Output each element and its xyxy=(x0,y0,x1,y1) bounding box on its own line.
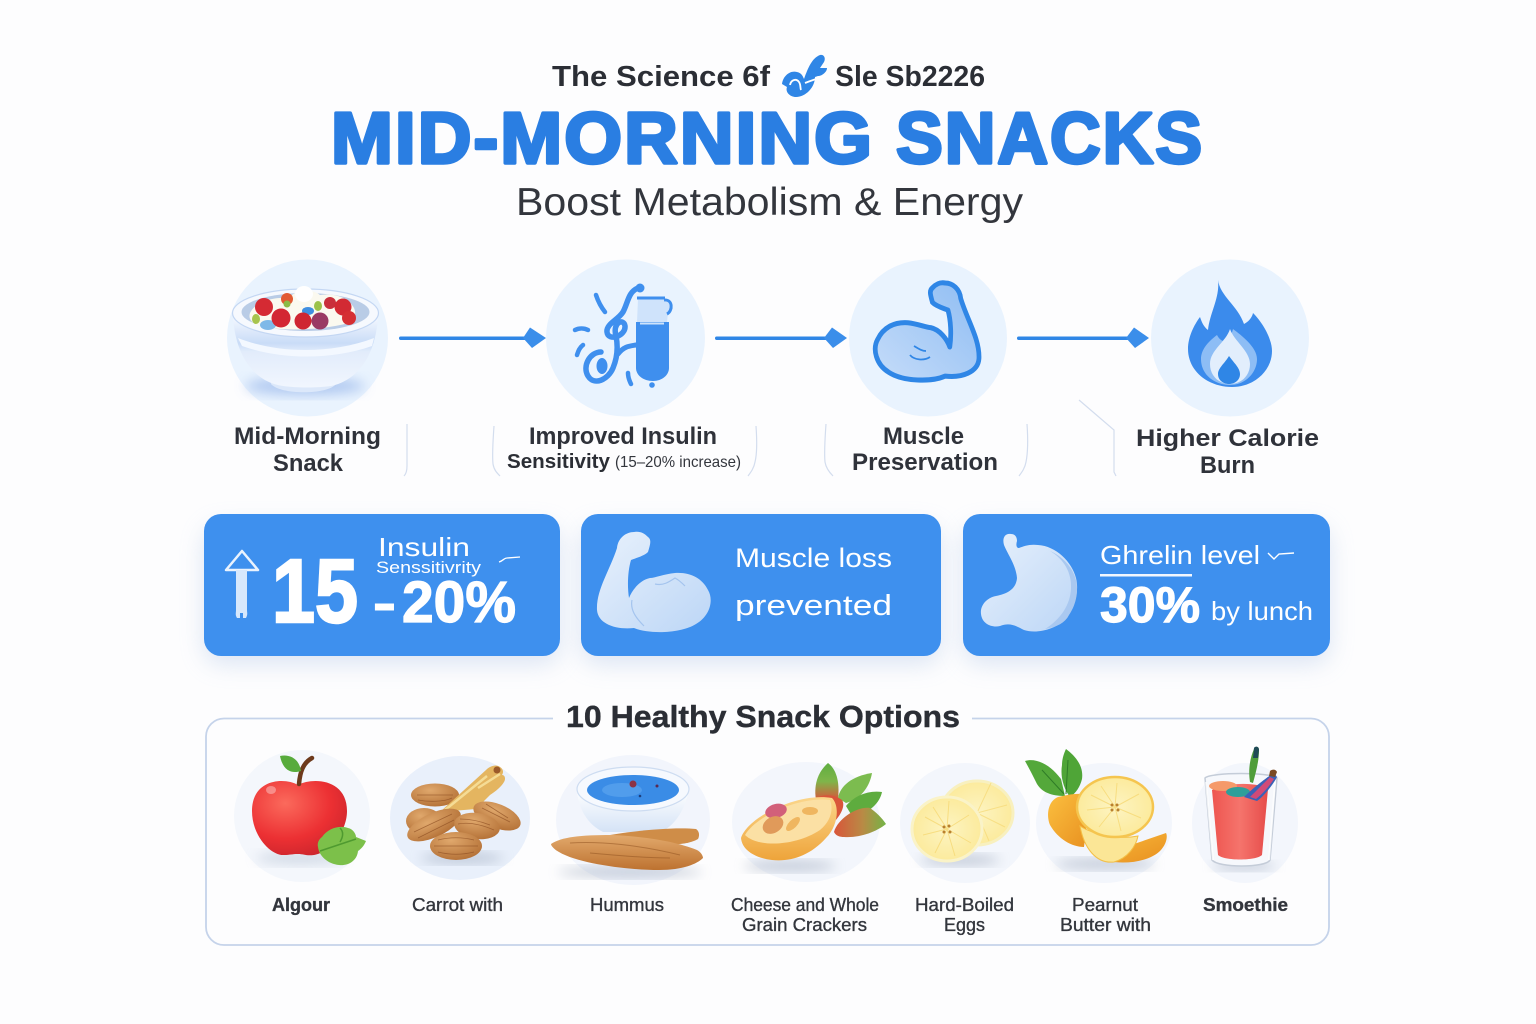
big number 15: 15 xyxy=(272,542,358,642)
title block xyxy=(331,55,1204,224)
step label xyxy=(852,423,998,476)
step label: Preservation xyxy=(852,449,998,476)
snack: carrot with xyxy=(390,756,530,915)
big number 20%: 20% xyxy=(402,570,516,635)
icon: flexed arm xyxy=(849,260,1007,416)
step 4: higher calorie burn xyxy=(1136,260,1319,479)
snack: smoothie xyxy=(1192,747,1298,915)
process flow xyxy=(227,260,1319,479)
label insulin: Insulin xyxy=(378,532,470,562)
step label xyxy=(1136,425,1319,479)
stat card: insulin sensitivity xyxy=(204,514,560,664)
label: Eggs xyxy=(944,915,985,935)
stat card: muscle loss prevented xyxy=(581,514,941,664)
step label: Snack xyxy=(273,450,344,477)
arrow 2 xyxy=(715,328,847,348)
label: Hummus xyxy=(590,895,664,915)
snack: apple xyxy=(234,750,370,915)
step label: Higher Calorie xyxy=(1136,425,1319,452)
label: Pearnut xyxy=(1072,895,1138,915)
icon: bowl of yogurt and berries xyxy=(227,260,388,416)
icon: stomach xyxy=(981,534,1077,632)
snack: hummus xyxy=(551,755,710,915)
label by lunch: by lunch xyxy=(1211,596,1313,626)
label: Carrot with xyxy=(412,895,503,915)
main heading: SNACKS xyxy=(896,99,1204,179)
icon: apple and green nut xyxy=(234,750,370,882)
label prevented: prevented xyxy=(735,590,892,622)
label sensitivity: Senssitivrity xyxy=(376,558,482,577)
label: Grain Crackers xyxy=(742,915,867,935)
label muscle loss: Muscle loss xyxy=(735,543,892,573)
step label xyxy=(507,423,741,473)
label: Algour xyxy=(272,895,330,915)
icon: flexed arm, pale xyxy=(597,532,711,632)
pre-title line right: Sle Sb2226 xyxy=(835,61,985,93)
label ghrelin level: Ghrelin level xyxy=(1100,540,1260,570)
label: Butter with xyxy=(1060,915,1151,935)
arrow 3 xyxy=(1017,328,1149,348)
stat card: ghrelin level xyxy=(963,514,1330,664)
icon: up arrow xyxy=(226,551,258,618)
icon: blue swirl logo xyxy=(782,55,827,97)
step label xyxy=(234,423,381,477)
step label: Burn xyxy=(1200,452,1255,479)
label xyxy=(915,895,1014,935)
icon: bowl and sticks xyxy=(551,755,710,885)
panel: healthy snack options xyxy=(206,699,1329,945)
panel heading: 10 Healthy Snack Options xyxy=(566,699,960,734)
icon: insulin vial and swirl xyxy=(546,260,705,416)
label xyxy=(1060,895,1151,935)
step 3: muscle preservation xyxy=(849,260,1007,476)
arrow 1 xyxy=(399,328,546,348)
icon: halved fruit and leaves xyxy=(732,762,886,882)
pre-title line left: The Science 6f xyxy=(552,61,770,93)
step label: Improved Insulin xyxy=(529,423,717,450)
step label: Muscle xyxy=(883,423,964,450)
step 1: mid-morning snack xyxy=(227,260,388,477)
main heading xyxy=(331,99,1204,179)
step 2: improved insulin sensitivity xyxy=(507,260,741,473)
icon: flame xyxy=(1151,260,1309,416)
subtitle: Boost Metabolism & Energy xyxy=(516,181,1024,224)
label: Smoethie xyxy=(1203,895,1288,915)
snack: cheese and whole grain crackers xyxy=(731,762,886,935)
snack: hard-boiled eggs xyxy=(900,763,1030,935)
icon: almonds and stick xyxy=(390,756,530,880)
snack: peanut butter with xyxy=(1025,749,1172,935)
icon: citrus wedges and leaves xyxy=(1025,749,1172,883)
main heading: MID-MORNING xyxy=(331,99,874,179)
icon: lemon slices xyxy=(900,763,1030,883)
number 30%: 30% xyxy=(1100,577,1200,633)
step label: (15–20% increase) xyxy=(615,454,741,471)
dash: - xyxy=(372,570,397,635)
label: Cheese and Whole xyxy=(731,895,879,915)
label xyxy=(731,895,879,935)
stat cards row xyxy=(204,514,1330,664)
step label: Sensitivity xyxy=(507,451,611,473)
icon: glass with straw xyxy=(1192,747,1298,883)
step label: Mid-Morning xyxy=(234,423,381,450)
label: Hard-Boiled xyxy=(915,895,1014,915)
